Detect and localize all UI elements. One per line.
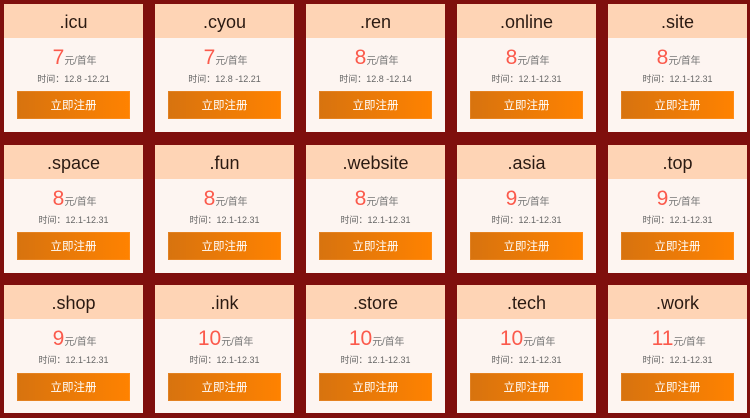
button: 立即注册 [202, 100, 248, 112]
button [470, 91, 583, 119]
button: 立即注册 [50, 241, 96, 253]
heading: .online [500, 12, 553, 32]
price: 10元/首年 [349, 327, 404, 350]
card: .work [608, 285, 747, 413]
card: .fun [155, 145, 294, 273]
card: .cyou [155, 4, 294, 132]
heading [608, 285, 747, 319]
card: .ink [155, 285, 294, 413]
heading [457, 4, 596, 38]
heading [306, 145, 445, 179]
heading: .tech [507, 293, 546, 313]
heading: .work [656, 293, 699, 313]
button [319, 373, 432, 401]
button [621, 373, 734, 401]
button: 立即注册 [654, 382, 700, 394]
button: 立即注册 [504, 100, 550, 112]
card: .site [608, 4, 747, 132]
price: 8元/首年 [657, 46, 700, 69]
price: 10元/首年 [198, 327, 253, 350]
time: 时间：12.1-12.31 [340, 355, 411, 365]
price: 11元/首年 [652, 327, 705, 350]
time: 时间：12.1-12.31 [642, 215, 713, 225]
heading: .ren [360, 12, 391, 32]
button: 立即注册 [202, 382, 248, 394]
button [319, 232, 432, 260]
heading [608, 145, 747, 179]
button [168, 232, 281, 260]
price: 8元/首年 [506, 46, 549, 69]
heading: .cyou [203, 12, 246, 32]
heading: .icu [59, 12, 88, 32]
price: 9元/首年 [657, 187, 700, 210]
price: 7元/首年 [204, 46, 247, 69]
heading: .store [353, 293, 398, 313]
button: 立即注册 [654, 100, 700, 112]
price: 8元/首年 [355, 46, 398, 69]
heading: .site [661, 12, 694, 32]
time: 时间：12.1-12.31 [491, 215, 562, 225]
button: 立即注册 [50, 100, 96, 112]
card: .online [457, 4, 596, 132]
button [621, 232, 734, 260]
heading [457, 145, 596, 179]
button: 立即注册 [504, 382, 550, 394]
card: .shop [4, 285, 143, 413]
time: 时间：12.1-12.31 [642, 74, 713, 84]
heading [306, 285, 445, 319]
price: 8元/首年 [204, 187, 247, 210]
button [621, 91, 734, 119]
time: 时间：12.1-12.31 [340, 215, 411, 225]
heading: .shop [51, 293, 96, 313]
time: 时间：12.1-12.31 [189, 355, 260, 365]
button: 立即注册 [50, 382, 96, 394]
button: 立即注册 [352, 241, 398, 253]
heading: .website [342, 153, 409, 173]
time: 时间：12.1-12.31 [642, 355, 713, 365]
heading [306, 4, 445, 38]
button [17, 232, 130, 260]
button [168, 373, 281, 401]
button [470, 232, 583, 260]
heading: .asia [507, 153, 546, 173]
time: 时间：12.8 -12.21 [37, 74, 110, 84]
card: .tech [457, 285, 596, 413]
heading: .space [47, 153, 100, 173]
time: 时间：12.8 -12.21 [188, 74, 261, 84]
price: 8元/首年 [355, 187, 398, 210]
price: 9元/首年 [53, 327, 96, 350]
heading [155, 145, 294, 179]
price: 8元/首年 [53, 187, 96, 210]
price: 7元/首年 [53, 46, 96, 69]
time: 时间：12.1-12.31 [38, 215, 109, 225]
heading [4, 285, 143, 319]
heading [155, 285, 294, 319]
heading [4, 145, 143, 179]
button [17, 91, 130, 119]
card: .store [306, 285, 445, 413]
card: .ren [306, 4, 445, 132]
time: 时间：12.1-12.31 [491, 355, 562, 365]
card: .asia [457, 145, 596, 273]
heading [4, 4, 143, 38]
card: .icu [4, 4, 143, 132]
time: 时间：12.8 -12.14 [339, 74, 412, 84]
button: 立即注册 [654, 241, 700, 253]
heading: .top [662, 153, 693, 173]
button: 立即注册 [504, 241, 550, 253]
card: .top [608, 145, 747, 273]
heading [608, 4, 747, 38]
time: 时间：12.1-12.31 [189, 215, 260, 225]
button [470, 373, 583, 401]
button [168, 91, 281, 119]
button: 立即注册 [352, 382, 398, 394]
heading: .fun [209, 153, 240, 173]
heading: .ink [210, 293, 238, 313]
card: .space [4, 145, 143, 273]
button: 立即注册 [352, 100, 398, 112]
time: 时间：12.1-12.31 [38, 355, 109, 365]
heading [155, 4, 294, 38]
heading [457, 285, 596, 319]
price: 10元/首年 [500, 327, 555, 350]
button [319, 91, 432, 119]
card: .website [306, 145, 445, 273]
button [17, 373, 130, 401]
time: 时间：12.1-12.31 [491, 74, 562, 84]
price: 9元/首年 [506, 187, 549, 210]
button: 立即注册 [202, 241, 248, 253]
